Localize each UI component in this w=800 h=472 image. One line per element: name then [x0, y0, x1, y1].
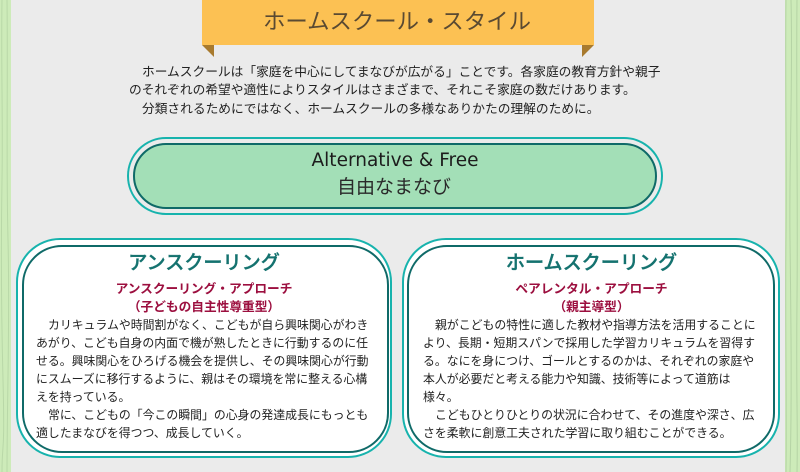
pill outer ring: [127, 137, 663, 215]
panel body text: えを持っている。: [36, 390, 130, 404]
panel subheading note: （子どもの自主性尊重型）: [128, 300, 280, 314]
panel body text: 常に、こどもの「今この瞬間」の心身の発達成長にもっとも: [48, 408, 368, 422]
panel body text: [36, 318, 368, 440]
panel body text: あがり、こども自身の内面で機が熟したときに行動するのに任: [36, 336, 368, 350]
panel inner ring: [22, 245, 389, 453]
panel body text: せる。興味関心をひろげる機会を提供し、その興味関心が行動: [36, 354, 368, 368]
pill japanese text: 自由なまなび: [337, 177, 451, 198]
pill english text: Alternative & Free: [312, 150, 478, 171]
panel body text: 様々。: [423, 390, 459, 404]
title banner: [202, 0, 594, 57]
panel body text: カリキュラムや時間割がなく、こどもが自ら興味関心がわき: [48, 318, 368, 332]
banner band: [202, 0, 594, 45]
right fold: [582, 45, 594, 57]
intro text: [129, 64, 660, 116]
panel heading: ホームスクーリング: [506, 253, 677, 274]
intro text: のそれぞれの希望や適性によりスタイルはさまざまで、それこそ家庭の数だけあります。: [129, 82, 636, 97]
panel body text: さを柔軟に創意工夫された学習に取り組むことができる。: [423, 426, 732, 440]
panel body text: こどもひとりひとりの状況に合わせて、その進度や深さ、広: [435, 408, 754, 422]
left fold: [202, 45, 214, 57]
panel body text: る。なにを身につけ、ゴールとするのかは、それぞれの家庭や: [423, 354, 754, 368]
panel body text: より、長期・短期スパンで採用した学習カリキュラムを習得す: [423, 336, 755, 350]
pill: alternative and free: [127, 137, 663, 215]
panel: homeschooling: [402, 238, 780, 458]
title text: ホームスクール・スタイル: [263, 9, 531, 34]
panel body text: 本人が必要だと考える能力や知識、技術等によって道筋は: [423, 372, 730, 386]
panel outer ring: [16, 238, 392, 458]
right green border strip: [785, 0, 800, 472]
pill inner fill: [133, 143, 657, 209]
panel body text: にスムーズに移行するように、親はその環境を常に整える心構: [36, 372, 367, 386]
panel body text: 親がこどもの特性に適した教材や指導方法を活用することに: [435, 318, 756, 332]
panel inner ring: [407, 245, 775, 453]
panel body text: [423, 318, 756, 440]
panel subheading note: （親主導型）: [553, 300, 630, 314]
panel body text: 適したまなびを得つつ、成長していく。: [36, 426, 249, 440]
panel: unschooling: [16, 238, 392, 458]
panel outer ring: [402, 238, 780, 458]
panel subheading: アンスクーリング・アプローチ: [116, 282, 292, 296]
left green border strip: [0, 0, 11, 472]
panel subheading: ペアレンタル・アプローチ: [515, 282, 668, 296]
panel heading: アンスクーリング: [128, 253, 280, 274]
intro text: ホームスクールは「家庭を中心にしてまなびが広がる」ことです。各家庭の教育方針や親子: [142, 64, 660, 79]
intro text: 分類されるためにではなく、ホームスクールの多様なありかたの理解のために。: [142, 101, 600, 116]
